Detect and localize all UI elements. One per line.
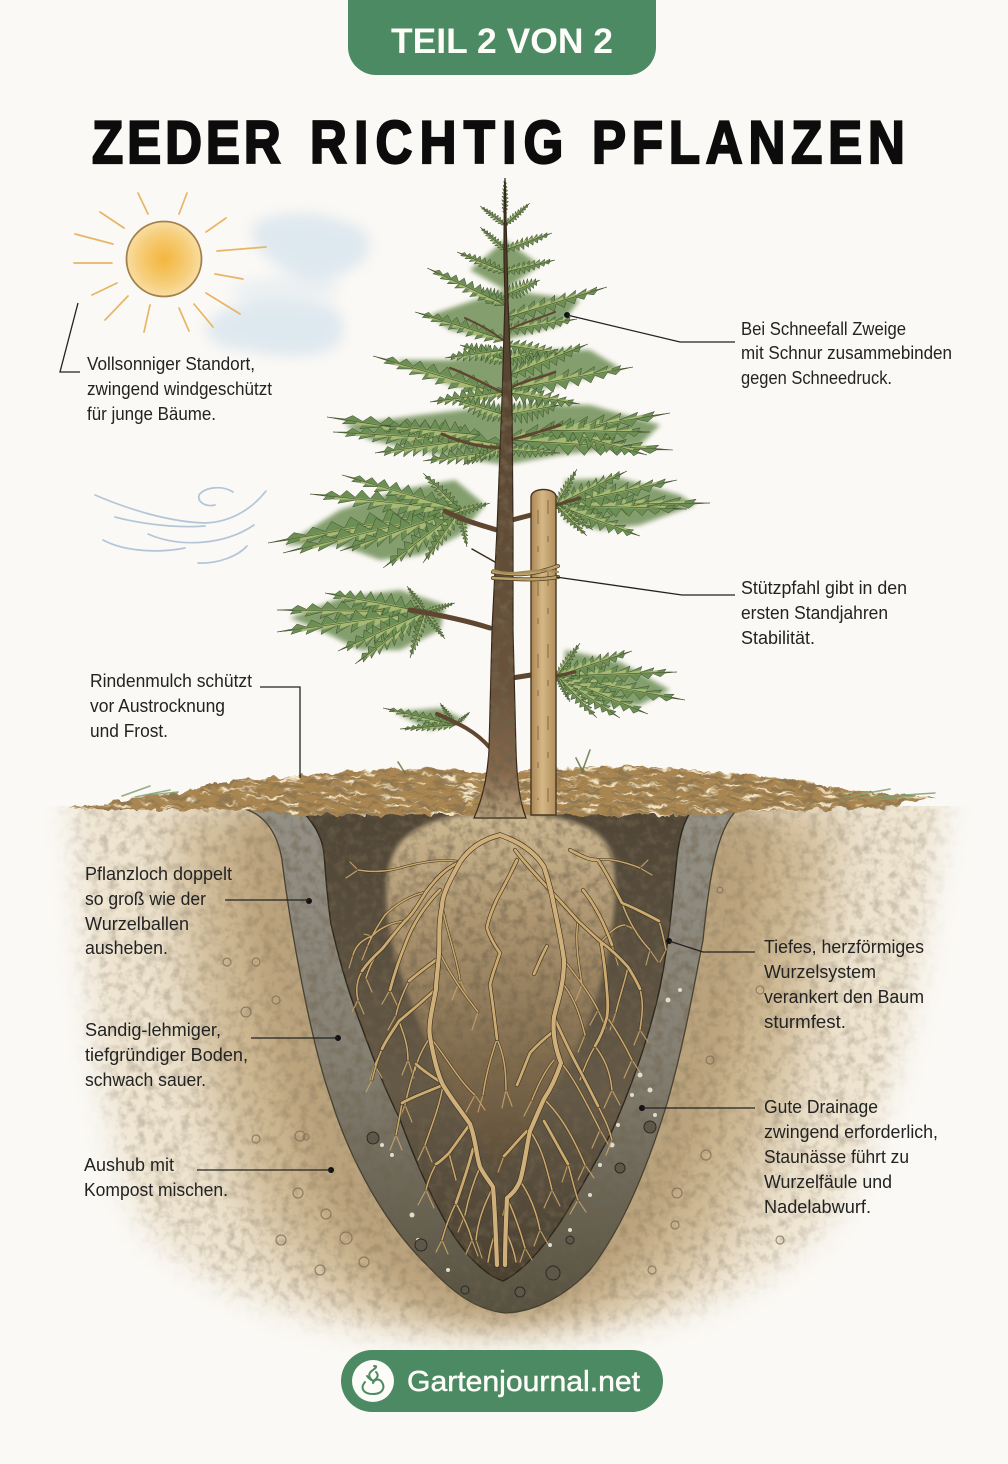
trunk: [473, 178, 527, 819]
callout: mulch: Rindenmulch schützt: [90, 671, 252, 691]
callout: planting hole: Pflanzloch doppelt: [85, 864, 232, 884]
title: PFLANZEN: [592, 109, 905, 176]
callout: drainage: Staunässe führt zu: [764, 1147, 909, 1167]
boughs: middle crown: [325, 335, 674, 470]
callout: stake: Stützpfahl gibt in den: [741, 578, 907, 598]
callout: planting hole: ausheben.: [85, 938, 168, 958]
callout: soil type: [85, 1020, 341, 1090]
illustration: wind: [95, 488, 266, 563]
callout: compost: [84, 1155, 334, 1200]
callout: location: Vollsonniger Standort,: [87, 354, 255, 374]
title: RICHTIG: [310, 109, 563, 176]
callout: root system: verankert den Baum: [764, 987, 924, 1007]
boughs: upper crown: [413, 178, 610, 370]
callout: mulch: [90, 671, 300, 778]
callout: stake: Stabilität.: [741, 628, 815, 648]
callout: stake: ersten Standjahren: [741, 603, 888, 623]
illustration: sun: [74, 193, 266, 332]
callout: root system: sturmfest.: [764, 1012, 846, 1032]
tree foliage: [266, 178, 710, 733]
callout: location: [60, 303, 272, 424]
callout: planting hole: [85, 864, 312, 958]
foliage mass underlay: [285, 240, 695, 730]
footer brand pill: [341, 1350, 663, 1412]
bough: bottom left small: [382, 701, 472, 733]
callout: snowfall: [564, 312, 952, 388]
title: [92, 109, 905, 176]
callout: compost: Kompost mischen.: [84, 1180, 228, 1200]
callout: root system: Wurzelsystem: [764, 962, 876, 982]
callout: mulch: vor Austrocknung: [90, 696, 225, 716]
callout: drainage: Nadelabwurf.: [764, 1197, 871, 1217]
illustration: clouds: [206, 213, 370, 357]
callout: mulch: und Frost.: [90, 721, 168, 741]
callout: soil type: tiefgründiger Boden,: [85, 1045, 248, 1065]
callout: stake: [556, 577, 907, 648]
bough: lower right large: [552, 463, 710, 546]
title: ZEDER: [92, 109, 281, 176]
bough: left low: [275, 581, 456, 672]
callout: drainage: Gute Drainage: [764, 1097, 878, 1117]
support stake: [531, 490, 556, 815]
planting hole: dark backfill soil: [306, 812, 690, 1282]
soil: surrounding ground: [57, 806, 958, 1350]
callout: planting hole: so groß wie der: [85, 889, 206, 909]
callout: soil type: schwach sauer.: [85, 1070, 206, 1090]
callout: drainage: zwingend erforderlich,: [764, 1122, 938, 1142]
callout: location: zwingend windgeschützt: [87, 379, 272, 399]
bough: lower left large: [266, 465, 491, 576]
callout: drainage: [639, 1097, 938, 1217]
footer brand pill: Gartenjournal.net: [407, 1366, 640, 1398]
callout: drainage: Wurzelfäule und: [764, 1172, 892, 1192]
callout: planting hole: Wurzelballen: [85, 914, 189, 934]
branches: [410, 312, 580, 748]
icon: sprout logo: [363, 1366, 383, 1394]
planting hole: gravel drainage layer: [245, 809, 736, 1314]
stake rope tie: [493, 566, 558, 579]
top banner: part label: TEIL 2 VON 2: [391, 22, 613, 61]
callout: root system: Tiefes, herzförmiges: [764, 937, 924, 957]
soil: pebbles: [223, 887, 784, 1275]
callout: root system: [666, 937, 924, 1032]
root ball: [384, 814, 618, 1144]
callout: location: für junge Bäume.: [87, 404, 216, 424]
callout: snowfall: mit Schnur zusammebinden: [741, 343, 952, 363]
mulch layer: [60, 750, 950, 820]
callout: snowfall: Bei Schneefall Zweige: [741, 319, 906, 339]
top banner: part label: [348, 0, 656, 75]
roots: [346, 835, 666, 1265]
callout: compost: Aushub mit: [84, 1155, 174, 1175]
callout: snowfall: gegen Schneedruck.: [741, 368, 892, 388]
callout: soil type: Sandig-lehmiger,: [85, 1020, 221, 1040]
bough: right low: [552, 640, 687, 726]
